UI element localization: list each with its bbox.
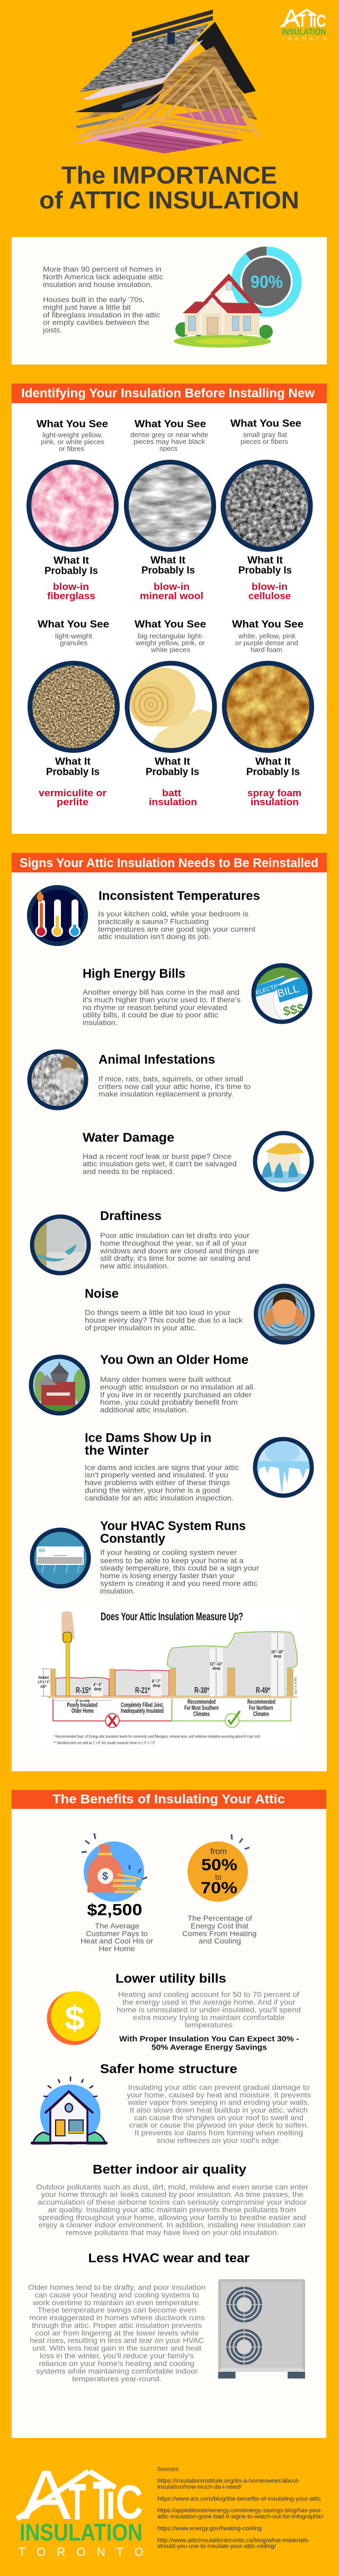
body text: accumulation of these airborne toxins can seriously compromise your indoor [38, 2198, 307, 2206]
icon: dollar coin [47, 1991, 101, 2045]
section header: benefits: The Benefits of Insulating Your Attic [52, 1792, 285, 1806]
sources: should-you-use-to-insulate-your-attic-ceiling/ [157, 2543, 276, 2550]
heading [100, 1519, 246, 1546]
card: spray foam insulation: white, yellow, pink [238, 632, 296, 640]
card: spray foam insulation: Probably Is [246, 766, 300, 778]
card: batt insulation: batt [162, 788, 181, 798]
card: blow-in fiberglass: light-weight yellow, [42, 431, 103, 439]
body text: These temperature swings can become even [38, 2306, 197, 2314]
icon: air conditioner [30, 1528, 91, 1588]
chart footnotes: * Recommended Dept. of Energy attic insulation levels for commonly used fiberglass, mineral wool, and cellulose insulation assuming about R-3 per inch. [53, 1734, 261, 1738]
card: vermiculite or perlite: perlite [57, 797, 88, 807]
body text: heat rises, resulting in less and tear on your HVAC [30, 2336, 204, 2345]
section header: signs: Signs Your Attic Insulation Needs to Be Reinstalled [20, 856, 318, 870]
caption [81, 1922, 153, 1953]
icon: outdoor HVAC unit [218, 2279, 305, 2379]
card: vermiculite or perlite: What You See [38, 618, 109, 630]
body text [83, 1152, 237, 1176]
panel: intro statistic [12, 237, 327, 365]
chart labels: poorly insulated and recommended: 16" on center [75, 1699, 90, 1703]
benefit: less HVAC wear and tear [28, 2251, 305, 2383]
caption: Heat and Cool His or [81, 1937, 153, 1945]
logo: top right: C [316, 11, 326, 30]
body text: more exaggerated in homes where ductwork runs [29, 2314, 204, 2322]
body text: enjoy a cleaner indoor environment. In addition, installing new insulation can [39, 2220, 306, 2229]
body text: It prevents ice dams from forming when melting [135, 2128, 303, 2137]
icon: squirrel [29, 1051, 86, 1108]
card: blow-in mineral wool: blow-in [154, 581, 190, 592]
tape measure [61, 1611, 75, 1696]
intro text: or empty cavities between the [43, 318, 149, 326]
body text: remove pollutants that may have lived on your old insulation. [66, 2228, 279, 2237]
card: blow-in fiberglass: blow-in [53, 581, 89, 592]
card: blow-in fiberglass: What You See [37, 418, 108, 430]
intro text: joists. [42, 326, 62, 334]
section header: benefits [12, 1790, 326, 1809]
insulation depth diagram: deep [273, 1654, 281, 1659]
icon: bills: $$$ [282, 1001, 306, 1019]
body text [98, 909, 255, 941]
body text: during the winter, your home is a good [85, 1486, 220, 1494]
caption: The Average [95, 1922, 139, 1930]
body text: of proper insulation in your attic. [85, 1324, 197, 1332]
card: blow-in mineral wool: Probably Is [141, 565, 195, 576]
heading: You Own an Older Home [100, 1353, 248, 1367]
card: batt insulation: What You See [135, 618, 206, 630]
intro text: Houses built in the early '70s, [43, 295, 145, 304]
heading: Safer home structure [100, 2062, 237, 2076]
body text: candidate for an attic insulation inspection. [85, 1494, 234, 1502]
insulation depth diagram: R-49* [256, 1686, 271, 1695]
sources: Sources: [157, 2466, 180, 2473]
sign: animal infestations [29, 1051, 251, 1108]
donut chart: 90% [236, 251, 297, 312]
icon: victorian house [30, 1355, 89, 1415]
body text [85, 1308, 243, 1332]
badge: to [215, 1873, 221, 1882]
stat: $2,500 [81, 1833, 153, 1953]
value: $2,500 [87, 1900, 142, 1919]
card: vermiculite or perlite [30, 618, 118, 807]
body text: Ice dams and icicles are signs that your attic [85, 1463, 239, 1471]
body text: can cause the shingles on your roof to swell and [134, 2113, 304, 2122]
body text: no rhyme or reason behind your elevated [83, 1003, 227, 1012]
card: batt insulation [127, 618, 218, 807]
sign: high energy bills [83, 965, 320, 1029]
chart labels: poorly insulated and recommended: For Northern [249, 1704, 273, 1712]
card: vermiculite or perlite: light-weight [55, 632, 92, 640]
icon: icicles [254, 1439, 313, 1497]
card: spray foam insulation: What You See [232, 618, 304, 630]
body text [85, 1463, 239, 1502]
body text: It also slows down heat buildup in your attic, which [130, 2106, 308, 2114]
body text: temperatures are one good sign your current [98, 925, 255, 933]
logo: footer: T [93, 2471, 110, 2531]
caption: Customer Pays to [86, 1929, 148, 1937]
body text: Older homes tend to be drafty, and poor insulation [28, 2283, 206, 2291]
card: blow-in fiberglass: What It [53, 555, 90, 567]
icon: money bag [82, 1833, 147, 1901]
sources [157, 2466, 324, 2550]
logo: top right: T [299, 11, 306, 31]
caption: Comes From Heating [182, 1929, 256, 1937]
insulation depth diagram: deep [94, 1687, 102, 1691]
intro text: of fibreglass insulation in the attic [43, 311, 160, 319]
heading: Noise [85, 1287, 119, 1301]
sources: attic-insulation-gone-bad-9-signs-to-watch-out-for-infographic/ [157, 2514, 324, 2520]
body text: Do things seem a little bit too loud in your [85, 1308, 230, 1317]
chart labels: poorly insulated and recommended: Climates [253, 1710, 269, 1717]
icon: money bag: $ [102, 1871, 108, 1882]
body text: seems to be able to keep your home at a [100, 1556, 244, 1564]
insulation depth diagram: 1.5"x 7.5" [38, 1681, 50, 1685]
heading: Constantly [100, 1532, 166, 1546]
callout: energy savings: With Proper Insulation You Can Expect 30% - [119, 2034, 299, 2043]
body text: snow refreezes on your roof's edge. [157, 2136, 281, 2145]
card: blow-in fiberglass: Probably Is [44, 565, 98, 577]
insulation depth diagram: deep [153, 1683, 160, 1688]
insulation depth diagram: Source: U.S. EPA [293, 1677, 297, 1694]
logo: top right: T [308, 10, 314, 31]
heading [85, 1431, 211, 1458]
body text: loss in the winter, you'll reduce your family's [40, 2352, 194, 2360]
logo: footer [17, 2456, 144, 2559]
section header: identifying insulation [12, 384, 327, 403]
body text: house every day? This could be due to a lack [85, 1316, 243, 1324]
card: spray foam insulation: or purple dense and [235, 639, 298, 647]
body text: unit. With less heat gain in the summer and heat [32, 2344, 201, 2352]
heading: Water Damage [83, 1131, 174, 1145]
logo: footer: A [21, 2456, 71, 2534]
body text: isn't properly vented and insulated. If you [85, 1471, 228, 1479]
intro text: insulation and house insulation. [43, 280, 153, 289]
icon: bills: ELECTRIC BILL [255, 978, 297, 996]
benefit: better indoor air quality [36, 2162, 308, 2237]
heading: Ice Dams Show Up in [85, 1431, 211, 1445]
card: batt insulation: white pieces [150, 645, 191, 653]
insulation depth diagram: R-15* [76, 1686, 91, 1695]
heading: Animal Infestations [99, 1053, 215, 1067]
card: blow-in fiberglass [29, 418, 117, 601]
card: blow-in mineral wool: mineral wool [140, 590, 203, 601]
body text: the energy used in the average home. And if your [122, 1998, 296, 2006]
card: batt insulation: Probably Is [146, 766, 199, 778]
chart labels: poorly insulated and recommended: Completely Filled Joist, [121, 1701, 164, 1709]
body text: spreading throughout your home, allowing your family to breathe easier and [39, 2213, 306, 2222]
badge: from [210, 1847, 227, 1856]
heading: the Winter [85, 1444, 149, 1458]
insulation depth diagram [38, 1611, 297, 1698]
card: batt insulation: big rectangular light- [138, 632, 203, 640]
card: blow-in cellulose: What You See [230, 418, 301, 430]
sign: draftiness [31, 1209, 259, 1275]
body text: If you live in or recently purchased an older [100, 1390, 252, 1399]
badge [188, 1834, 249, 1901]
body text: through the attic. Proper attic insulation prevents [32, 2321, 202, 2329]
sign: HVAC runs constantly [30, 1519, 259, 1595]
insulation depth diagram: 13"–14" [210, 1662, 222, 1667]
body text: air quality. Insulating your attic maintain prevents these pollutants from [48, 2205, 296, 2214]
heading: Draftiness [100, 1209, 162, 1223]
body text: temperatures [185, 2020, 233, 2029]
body text [98, 1075, 251, 1098]
card: vermiculite or perlite: What It [55, 756, 91, 768]
insulation depth diagram: 16"–18" [271, 1650, 284, 1654]
sources: http://www.atticinsulationtoronto.ca/blog/what-materials- [157, 2537, 310, 2544]
card: blow-in fiberglass: fiberglass [47, 590, 95, 601]
insulation depth diagram: deep [212, 1666, 220, 1671]
card: blow-in cellulose [222, 418, 310, 601]
body text: system is creating it and you need more attic [100, 1579, 257, 1587]
badge: 50% [201, 1855, 237, 1874]
card: vermiculite or perlite: Probably Is [46, 766, 100, 778]
body text: windows and doors are closed and things are [100, 1246, 259, 1255]
body text: Outdoor pollutants such as dust, dirt, mold, mildew and even worse can enter [36, 2182, 308, 2191]
badge: 70% [201, 1879, 237, 1897]
callout: energy savings [119, 2034, 299, 2052]
caption [182, 1914, 256, 1945]
body text [28, 2283, 206, 2383]
body text [100, 1375, 255, 1414]
body text: your home, caused by heat and moisture. It prevents [127, 2090, 311, 2099]
body text [100, 1231, 259, 1270]
benefit: lower utility bills [47, 1972, 301, 2052]
body text: temperatures year-round. [72, 2374, 162, 2383]
heading: High Energy Bills [83, 967, 185, 981]
donut chart: 90%: 90% [251, 272, 283, 292]
intro text: North America lack adequate attic [43, 272, 163, 281]
card: spray foam insulation: What It [255, 756, 291, 768]
body text: If your heating or cooling system never [100, 1548, 237, 1556]
card: blow-in mineral wool [126, 418, 214, 601]
card: blow-in mineral wool: dense grey or near white [130, 431, 208, 439]
title: of ATTIC INSULATION [39, 186, 299, 214]
logo: footer: I [106, 2483, 115, 2527]
card: blow-in cellulose: pieces or fibers [240, 438, 289, 445]
card: vermiculite or perlite: vermiculite or [39, 788, 106, 798]
heading: Less HVAC wear and tear [88, 2251, 249, 2265]
logo: top right: TORONTO [281, 37, 326, 41]
title [39, 161, 299, 214]
body text: Poor attic insulation can let drafts into your [100, 1231, 249, 1240]
body text [83, 988, 240, 1027]
body text: Heating and cooling account for 50 to 70 percent of [118, 1990, 299, 1999]
caption: Energy Cost that [191, 1922, 248, 1930]
card: blow-in cellulose: blow-in [252, 581, 288, 592]
sign: ice dams [85, 1431, 313, 1502]
logo: footer: TORONTO [19, 2545, 144, 2559]
icon: green check [225, 1711, 240, 1727]
chart labels: poorly insulated and recommended: Recommended [247, 1698, 275, 1706]
body text: water vapor from seeping in and eroding your walls. [128, 2098, 310, 2107]
card: spray foam insulation: insulation [251, 797, 299, 807]
body text [117, 1990, 301, 2029]
card: vermiculite or perlite: granules [60, 639, 88, 647]
sign: older home [30, 1353, 255, 1415]
card: blow-in cellulose: Probably Is [238, 565, 292, 576]
body text: Many older homes were built without [100, 1375, 231, 1383]
body text: steady temperature, this could be a sign your [100, 1564, 259, 1572]
body text: new attic insulation. [100, 1261, 169, 1270]
icon: red x [105, 1714, 119, 1727]
icon: flooded house [255, 1133, 312, 1190]
logo: top right: A [282, 5, 300, 33]
icon: dollar coin: $ [65, 1999, 85, 2037]
body text: home is uninsulated or under-insulated, you'll spend [117, 2005, 301, 2014]
insulation depth diagram: 6"–7" [152, 1679, 161, 1684]
chart labels: poorly insulated and recommended [53, 1698, 291, 1727]
body text: your home through air leaks caused by poor insulation. As time passes, the [41, 2190, 304, 2199]
body text: attic insulation gets wet, it can't be salvaged [83, 1160, 237, 1168]
roof illustration [70, 10, 258, 153]
body text: crack or cause the plywood on your deck to soften. [129, 2121, 309, 2129]
stat: 50% to 70% [182, 1834, 256, 1945]
panel: signs [12, 872, 327, 1771]
body text: home throughout the year, so if all of your [100, 1239, 247, 1247]
body text [127, 2083, 311, 2145]
card: batt insulation: weight yellow, pink, or [135, 639, 206, 647]
benefit: safer home structure [31, 2062, 311, 2145]
body text: attic insulation isn't doing its job. [98, 932, 211, 941]
body text: If mice, rats, bats, squirrels, or other small [99, 1075, 243, 1083]
card: spray foam insulation: hard foam [251, 645, 282, 653]
body text: insulation. [100, 1587, 135, 1595]
card: batt insulation: insulation [149, 797, 197, 807]
body text: cool air from lingering at the lower levels while [35, 2328, 199, 2337]
chart title: Does Your Attic Insulation Measure Up? [101, 1611, 243, 1623]
sources: https://www.ars.com/blog/the-benefits-of-insulating-your-attic [157, 2496, 322, 2502]
body text: Had a recent roof leak or burst pipe? Once [83, 1152, 231, 1160]
sign: noise [85, 1286, 314, 1343]
panel: benefits [12, 1809, 326, 2438]
body text: make insulation replacement a priority. [99, 1090, 234, 1098]
chart: does your attic insulation measure up [34, 1605, 302, 1750]
chart labels: poorly insulated and recommended: Older Home [72, 1707, 94, 1715]
card: blow-in mineral wool: What You See [135, 418, 206, 430]
insulation depth diagram: R-38* [194, 1686, 210, 1695]
logo: top right: I [313, 14, 316, 30]
card: blow-in fiberglass: pink, or white pieces [41, 438, 105, 446]
body text: practically a sauna? Fluctuating [98, 917, 209, 925]
body text [36, 2182, 308, 2237]
callout: energy savings: 50% Average Energy Savings [151, 2043, 267, 2052]
card: batt insulation: What It [155, 756, 191, 768]
intro text [42, 265, 163, 334]
logo: footer: INSULATION [20, 2519, 142, 2546]
card: spray foam insulation: spray foam [247, 788, 301, 798]
heading: Better indoor air quality [93, 2162, 247, 2177]
insulation depth diagram: Joist** [40, 1685, 47, 1689]
heading: Lower utility bills [115, 1972, 226, 1986]
sources: insulation/how-much-do-i-need/ [157, 2484, 242, 2490]
caption: and Cooling [199, 1937, 241, 1945]
heading: Inconsistent Temperatures [99, 889, 260, 903]
body text: Another energy bill has come in the mail and [83, 988, 239, 996]
body text: insulation. [83, 1018, 118, 1027]
card: blow-in mineral wool: pieces may have black [133, 438, 206, 445]
sign: inconsistent temperatures [27, 885, 260, 946]
heading: Your HVAC System Runs [100, 1519, 246, 1533]
body text: have problems with either of these things [85, 1478, 230, 1487]
sources: https://www.energy.gov/heating-cooling [157, 2526, 262, 2532]
card: blow-in mineral wool: specs [159, 444, 177, 452]
section header: identifying insulation: Identifying Your Insulation Before Installing New [21, 386, 315, 400]
sources: https://appleblossomenergy.com/energy-savings-blog/has-your- [157, 2508, 323, 2514]
card: blow-in fiberglass: or fibres [59, 444, 85, 452]
caption: The Percentage of [188, 1914, 252, 1922]
body text: extra money trying to maintain comfortable [133, 2013, 285, 2022]
body text [100, 1548, 259, 1595]
icon: house on lawn [174, 274, 273, 348]
card: blow-in mineral wool: What It [150, 554, 186, 566]
card: blow-in cellulose: What It [247, 554, 283, 566]
body text: still drafty, it's time for some air sealing and [100, 1254, 251, 1262]
insulation depth diagram: 4"–5" [93, 1682, 102, 1687]
card: blow-in cellulose: cellulose [248, 590, 291, 601]
body text: critters now call your attic home, it's time to [98, 1082, 251, 1090]
logo: footer: C [115, 2476, 143, 2529]
logo: footer: T [69, 2474, 86, 2530]
icon: person covering ears [254, 1286, 314, 1343]
body text: Is your kitchen cold, while your bedroom is [98, 909, 248, 918]
body text: and needs to be replaced. [83, 1167, 174, 1176]
body text: home, you could probably benefit from [100, 1398, 238, 1406]
body text: work overtime to maintain an even temperature. [32, 2298, 201, 2307]
chart labels: poorly insulated and recommended: Climates [193, 1710, 210, 1717]
body text: it's much higher than you're used to. If there's [83, 995, 240, 1004]
insulation depth diagram: Standard [38, 1676, 49, 1680]
icon: bills: BILL [276, 983, 300, 1000]
chart footnotes: ** Standard joists are sold as 2' x 8" but usually measure closer to 1.5" x 7.5" [53, 1741, 155, 1745]
body text: can cause your heating and cooling systems to [34, 2290, 199, 2299]
panel: insulation types [12, 403, 327, 834]
sources: https://insulationinstitute.org/im-a-homeowner/about- [157, 2478, 300, 2484]
card: spray foam insulation [224, 618, 312, 807]
logo: top right [281, 5, 326, 41]
icon: bills [251, 963, 313, 1024]
logo: top right: INSULATION [282, 27, 326, 37]
body text: enough attic insulation or no insulation at all. [100, 1382, 255, 1391]
card: blow-in cellulose: small gray flat [243, 431, 287, 439]
body text: reliance on your home's heating and cooling [39, 2359, 194, 2368]
icon: drafty window [31, 1215, 90, 1275]
chart labels: poorly insulated and recommended: For Most Southern [184, 1704, 219, 1712]
body text: additional attic insulation. [100, 1405, 189, 1414]
icon: thermometers [27, 885, 88, 946]
body text: home is losing energy faster than your [100, 1571, 235, 1580]
chart labels: poorly insulated and recommended: Recommended [188, 1698, 216, 1706]
chart labels: poorly insulated and recommended: Inadequately Insulated [121, 1707, 164, 1715]
sign: water damage [83, 1131, 312, 1190]
intro text: More than 90 percent of homes in [43, 265, 162, 273]
insulation depth diagram: R-21* [135, 1686, 150, 1695]
body text: systems while maintaining comfortable indoor [36, 2366, 198, 2375]
body text: utility bills, it could be due to poor attic [83, 1011, 218, 1019]
caption: Her Home [99, 1944, 135, 1953]
title: The IMPORTANCE [61, 161, 277, 189]
chart footnotes [53, 1734, 261, 1745]
chart labels: poorly insulated and recommended: Poorly Insulated [67, 1701, 97, 1709]
body text: Insulating your attic can prevent gradual damage to [128, 2083, 310, 2091]
intro text: might just have a little bit [43, 303, 131, 311]
icon: house [31, 2077, 108, 2145]
